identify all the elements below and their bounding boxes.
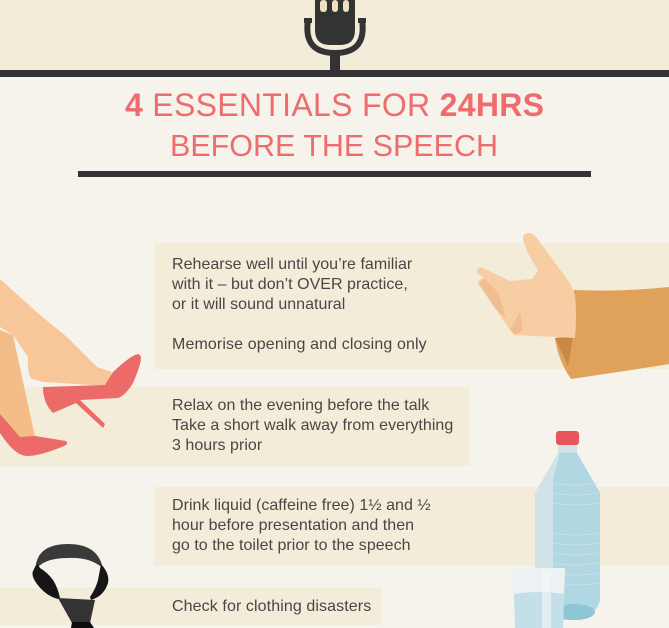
text: drink: hour before presentation and then	[172, 517, 414, 534]
icon: microphone	[304, 0, 366, 70]
text: rehearse	[172, 256, 412, 313]
text: memorise: Memorise opening and closing only	[172, 336, 427, 353]
text: relax: Relax on the evening before the talk	[172, 397, 429, 414]
title	[125, 87, 544, 163]
text: relax: Take a short walk away from everything	[172, 417, 453, 434]
text: rehearse: with it – but don’t OVER practice,	[172, 276, 408, 293]
text: drink	[172, 497, 431, 554]
title: BEFORE THE SPEECH	[170, 129, 498, 163]
title: 4 ESSENTIALS FOR 24HRS	[125, 87, 544, 123]
band: clothing	[0, 588, 382, 625]
title rule	[78, 171, 591, 177]
band: relax	[0, 387, 470, 466]
text: drink: Drink liquid (caffeine free) 1½ and ½	[172, 497, 431, 514]
text: rehearse: or it will sound unnatural	[172, 296, 345, 313]
band: rehearse	[154, 243, 669, 369]
text: relax: 3 hours prior	[172, 437, 262, 454]
text: drink: go to the toilet prior to the speech	[172, 537, 411, 554]
text: rehearse: Rehearse well until you’re familiar	[172, 256, 412, 273]
band: drink	[154, 487, 669, 566]
header band	[0, 0, 669, 71]
text: clothing: Check for clothing disasters	[172, 598, 371, 615]
header rule	[0, 70, 669, 77]
text: relax	[172, 397, 453, 454]
